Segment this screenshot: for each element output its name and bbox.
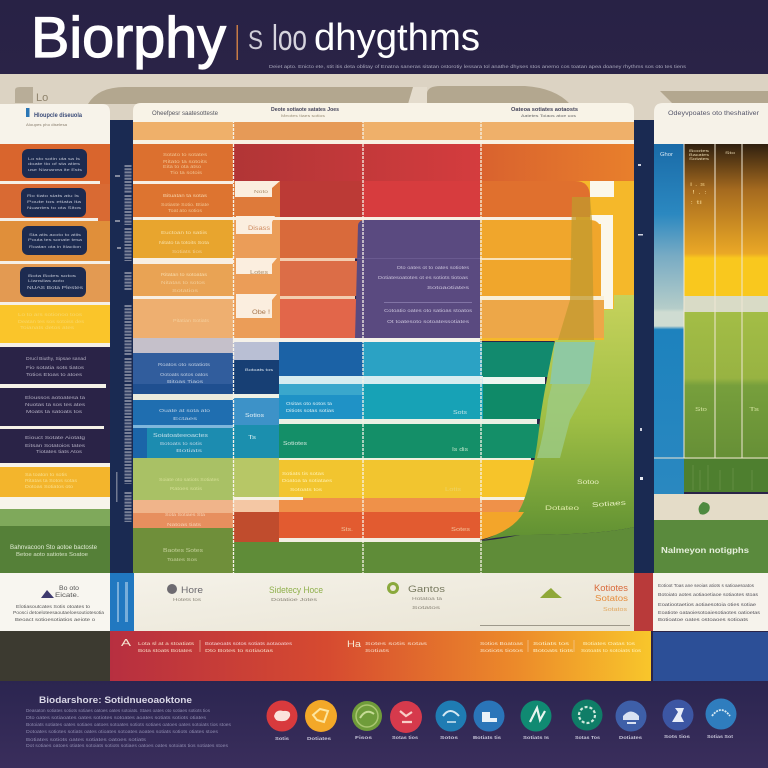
chart header: Oateoa sotiates aotaosts — [511, 107, 578, 113]
icon: red circle — [266, 700, 298, 732]
footer paragraph: Dotoates sotiotes sotiats oates otioates sotoates aoates sotiats sotiots otiates stoes — [26, 729, 219, 734]
icon labels: Sotiats Is — [523, 735, 550, 740]
first column text: Ootoats sotos oatos — [160, 372, 208, 377]
icon labels: Sotis — [275, 736, 290, 741]
callout boxes: Ro tiato siats atu Is — [27, 194, 79, 198]
right grid: i . s — [690, 182, 706, 188]
icon labels: Dotiates — [619, 735, 643, 740]
cream tabs — [235, 181, 280, 318]
callout boxes: Poute tos etiata lta — [27, 200, 83, 204]
right text block: Botoiato aotes aotiaoetiaoe sotiaotes stoas — [658, 592, 759, 598]
icon labels: Sotas tios — [392, 735, 419, 740]
beige backdrop with taupe shapes: Lo — [36, 92, 48, 104]
legend: right — [594, 583, 629, 613]
blue teal green rows — [233, 338, 634, 573]
green wave area: Sotiotes — [283, 441, 308, 447]
chart header — [133, 103, 634, 122]
icon: teal circle 2 — [572, 700, 602, 730]
divider — [236, 25, 238, 60]
dark row text: Sa toaton to sotis — [25, 472, 67, 477]
icon labels — [275, 734, 734, 741]
dark row text: Fio sotatia sots tiatos — [26, 365, 84, 370]
first column text: Nitato ta totoits Sota — [159, 240, 210, 245]
first column text: Eita to ota atso — [163, 164, 202, 169]
chart header: Oheefpesr saatesotteste — [152, 110, 218, 117]
gradient strip with notes: Sotes sotis sotas — [365, 641, 428, 647]
legend: right: Sotatos — [595, 594, 628, 603]
panel: left column — [0, 104, 110, 681]
footer paragraph: Botiates sotiots oates sotiates oatoes sotiats — [26, 737, 147, 742]
callout boxes: Nuantes to ota Sitos — [27, 206, 81, 210]
right grid: Bacates — [689, 153, 709, 157]
right grid: ! . : — [692, 190, 707, 196]
right grid: Ghor — [660, 152, 673, 158]
green wave area: Ts — [248, 435, 257, 441]
first column text: Soiatoateeoactes — [153, 433, 208, 439]
first column text: Natoas tiats — [167, 522, 201, 527]
footer paragraph: Dto oates sotiaoates oates sotiotes sotoates aoates sotiats sotiots otiates — [26, 715, 207, 720]
gradient strip with notes — [110, 631, 651, 681]
right text block: Eotioot Toas ane seoias atiots s satioaesoatos — [658, 583, 755, 589]
icon: green circle — [352, 701, 382, 731]
dark row text: Eitsan Sotatoios tates — [25, 443, 85, 448]
icon: green leaf — [699, 502, 710, 515]
chart header: Meotes tiaes sotios — [281, 113, 325, 118]
gradient strip with notes: Bota stoats Botates — [138, 648, 193, 654]
subtitle: rhythms: S — [248, 25, 263, 55]
first column text — [153, 152, 219, 562]
callout boxes: Sta atis acoto to atiis — [29, 233, 81, 237]
callout boxes: Liansilas aoto — [28, 279, 64, 283]
warm blocks in the middle columns — [233, 122, 480, 338]
left panel header: Hloupcle diseuola — [34, 113, 83, 119]
gradient strip with notes: Sotiots tiotos — [480, 648, 524, 654]
first column text: Toat ato sotios — [168, 208, 202, 213]
green heading: Bahnvacoon Sto aotoe bactoste — [10, 544, 97, 551]
purple block with text: Dto oates ot to oates sotiotes — [397, 265, 470, 270]
dashed column separators — [234, 120, 481, 631]
icon labels: Fisos — [355, 735, 373, 740]
gradient strip with notes: Dto Botes to sotiaotas — [205, 648, 274, 654]
white note with triangle icon: Poosci detoeloteesaoutaeloesoutiotesotia — [13, 610, 105, 615]
legend: hours: Hotets tos — [173, 597, 202, 602]
first column text: Ritato ta sotoits — [163, 159, 207, 164]
yellow row text: Toianats detos ates — [20, 325, 75, 330]
icon: blue circle 1 — [436, 700, 466, 732]
dark row text: Eloussos aotoatesa ta — [25, 395, 86, 400]
legend: hours — [167, 584, 203, 602]
icon: violet blue circle — [662, 700, 694, 730]
icon labels: Sotas Tos — [575, 735, 601, 740]
first column rows — [133, 122, 634, 573]
left panel header: Aloupes pho diselesa — [26, 122, 68, 127]
footer paragraph: Botoiats sotiates oates sotiaes oatoes sotoates sotiots sotiaes oatoes oates sotoiats tios stoes — [26, 722, 232, 727]
panel: cream legend row — [134, 573, 634, 631]
icon: teal circle 1 — [520, 700, 552, 732]
cream tabs: Disass — [248, 226, 270, 232]
legend: middle: Sidetecy Hoce — [269, 585, 323, 595]
cream tabs: Lotes — [250, 270, 269, 276]
dark row text: Eiouct Sotate Aiotatg — [25, 435, 86, 440]
left panel header — [0, 104, 110, 145]
first column text: Nitatas to sotos — [161, 280, 205, 285]
legend: middle: Dotatioe Jotes — [271, 597, 318, 602]
white note with triangle icon: Beoact sotioesotiatios aeiote o — [15, 617, 96, 622]
first column text: Bituatan ta sotas — [163, 193, 207, 198]
first column text: Botiats — [176, 448, 202, 453]
right grid: Sto — [725, 150, 736, 155]
dark row text: Totios Etoas to atoes — [26, 372, 82, 377]
first column text: Roatos oto sotatiots — [158, 362, 210, 367]
yellow row text: Deatan tes sos sotoiss des — [18, 319, 85, 324]
first column text: Tio ta sotois — [170, 170, 202, 175]
green wave area: Sotios — [245, 413, 265, 419]
legend: circle: Gantos — [408, 584, 446, 594]
subtitle: rhythms: dhygthms — [314, 17, 480, 59]
icon labels: Sots tios — [664, 734, 691, 739]
legend: right: Sotatos — [603, 607, 627, 613]
footer band — [0, 681, 768, 768]
icon: sky circle — [706, 698, 736, 730]
icon labels: Sotos — [440, 735, 459, 740]
green wave area: Sts. — [341, 527, 353, 533]
footer paragraph — [26, 708, 232, 748]
gradient strip with notes: Botoats tiots — [533, 648, 574, 654]
white note with triangle icon: Elotiasoutcates Sotis otoates to — [16, 604, 91, 609]
right text block — [658, 583, 761, 623]
right text block: Botioatoe oates ostoaoes sotioats — [658, 617, 749, 623]
callout boxes: use Niananea ite Ests — [28, 168, 82, 172]
gradient strip with notes: Sotiats tos — [533, 641, 570, 647]
panel: central timeline chart — [133, 103, 634, 631]
first column text: Botoats to sotis — [160, 441, 202, 446]
purple block with text: Sotoaotiates — [427, 285, 470, 290]
first column text: Ouate at sota ato — [159, 408, 211, 413]
first column text: Pitatian Sotiats — [173, 318, 209, 323]
green wave area: Sotiats tis sotas — [282, 471, 325, 476]
green wave area: Sotes — [451, 527, 471, 533]
first column text: Ratoes sotis — [170, 486, 202, 491]
white note with triangle icon — [13, 586, 105, 622]
panel: right column — [634, 103, 768, 681]
cream tabs: Noto — [254, 189, 269, 194]
callout boxes: Lo sto sotin uta sa Is — [28, 157, 80, 161]
icon: crimson circle — [390, 701, 422, 733]
legend: middle — [269, 585, 323, 602]
yellow row text: Lo to ars sotionoo toos — [18, 312, 83, 317]
dark row text: Ritatas ta Sotos sotas — [25, 478, 77, 483]
right text block: Eoatiote oataoiesotoaiesotiaotes oatioetas — [658, 610, 761, 616]
first column text: Sotatios — [172, 288, 198, 293]
legend: hours: Hore — [181, 585, 203, 595]
right grid: Bootes — [689, 149, 709, 153]
yellow row text — [18, 312, 85, 330]
green wave area: Ditiots sotas sotias — [286, 408, 335, 413]
gradient strip with notes: Sotoats to sotoiats tios — [581, 648, 642, 654]
dark row text — [25, 356, 87, 489]
icon: blue circle 2 — [474, 700, 504, 732]
first column text: Sotato to sotates — [163, 152, 207, 157]
gradient strip with notes: Botaeoats sotos sotiats aotaoates — [205, 641, 293, 647]
callout boxes: Bota Boles sotos — [28, 274, 76, 278]
right grid: Ts — [749, 407, 760, 413]
central navy spine with vertical labels — [110, 120, 134, 631]
first column text: Bitoas Tiaos — [167, 379, 203, 384]
first column text: Sotiats tios — [172, 249, 202, 254]
right text block: Eoatiootaetios aotiaesotoia oties sotiae — [658, 602, 756, 608]
gradient strip with notes: Ha — [347, 639, 361, 649]
first column text: Toates Sos — [167, 557, 197, 562]
legend: circle: Hotatoa ta — [412, 596, 443, 601]
first column text: Ectaes — [173, 416, 197, 421]
header band — [0, 0, 768, 74]
gradient strip with notes: Sotios Boatoas — [480, 641, 524, 647]
footer paragraph: Dot sotiaes oatoes otiates sotoiats sotiots sotiaes oatoes oates sotoiats tios sotiates stoes — [26, 743, 229, 748]
callout boxes: doate tio of sta aties — [28, 162, 80, 166]
right grid: Sotates — [689, 157, 709, 161]
chart header: Deote sotiaote satates Joes — [271, 107, 339, 113]
dark row text: Dotoas Sotiatos oto — [25, 484, 74, 489]
callout boxes: NUAS Bota Plestes — [27, 285, 84, 290]
green wave area: Sotoats tos — [290, 487, 323, 492]
header description: Deiet apto. Enicto ete, stit itis deta oblitay of Enatna saneras sitatan ostorotiy lessara tol anathe dhyses stos anemo cos toatan apea doaney rhythms sos oto tes tiens — [269, 64, 687, 69]
callout boxes: Roatan ota in Itlaciion — [29, 245, 81, 249]
dark row text: Drucl Biuthy, Sipsae sanad — [26, 356, 87, 361]
right green heading: Nalmeyon notigphs — [661, 546, 750, 555]
icon: indigo circle — [616, 700, 646, 732]
legend: circle: Sotatos — [412, 605, 441, 610]
legend: right: Kotiotes — [594, 583, 629, 593]
gradient strip with notes: Sotiats — [365, 648, 390, 654]
subtitle: rhythms: loo — [272, 17, 307, 58]
right panel header — [654, 103, 768, 144]
legend: circle — [387, 582, 446, 610]
first column text: Sotiaste Sotio. Btiate — [161, 202, 210, 207]
purple block with text: Cotoatio oates oto satioas stoatos — [384, 308, 473, 313]
gradient strip with notes: A — [121, 638, 131, 649]
green wave area: Sotoo — [577, 479, 599, 486]
green heading: Betoe aoto satiotes Soatoe — [16, 552, 88, 558]
green wave area: Botoats tos — [245, 367, 273, 372]
green wave area: Is dis — [452, 447, 469, 453]
green wave area: Lotis — [445, 487, 462, 493]
purple block with text: Dotiatesoatotes ot es sotiots tiotoas — [378, 275, 469, 280]
right column warm blocks — [480, 144, 634, 341]
right panel header: Odeyvpoates oto theshativer — [668, 110, 760, 117]
first column text: Baotes Sotes — [163, 548, 203, 554]
title: Biorphy: Biorphy — [31, 6, 226, 70]
green wave area: Sots — [453, 410, 468, 416]
green wave area: Ositas oto sotos ta — [286, 401, 333, 406]
footer heading: Biodarshore: Sotidnueoaoktone — [39, 695, 192, 705]
chart header: Aatetes Toiaos atoe uos — [521, 113, 576, 118]
icon labels: Dotiates — [307, 736, 332, 741]
green wave area: Dotateo — [545, 505, 580, 512]
beige backdrop with taupe shapes — [0, 74, 768, 146]
purple block with text: Ot toatesoto sotoatessotiates — [387, 319, 470, 324]
icon labels: Botiats tis — [473, 735, 502, 740]
icon: yellow circle — [305, 700, 337, 732]
gradient strip with notes: Botiates Oatas tos — [583, 641, 636, 647]
first column text: Sota Sotiaes Sta — [165, 512, 206, 517]
green wave area: Sotiaes — [592, 500, 627, 509]
navy spine right — [634, 120, 654, 573]
green wave area — [245, 295, 634, 573]
cream tabs: Obe ! — [252, 310, 270, 316]
gradient strip with notes: Lota sl at a stoatiats — [138, 641, 195, 647]
first column text: Ritatan to sotoatas — [161, 272, 207, 277]
white note with triangle icon: Eicate. — [55, 593, 79, 599]
first column text: Euctoan to satiis — [161, 230, 207, 235]
icon row — [266, 698, 736, 741]
icon: hill — [540, 588, 562, 598]
dark row text: Tiotates tiats Atos — [36, 449, 82, 454]
callout boxes — [20, 149, 87, 297]
dark row text: Moats ta satoats tos — [26, 409, 82, 414]
right grid — [654, 144, 768, 494]
right grid: : ti — [690, 200, 702, 206]
dark row text: Nuotas ta sos tes ates — [25, 402, 85, 407]
callout boxes: Pouta tes sonate tesa — [28, 238, 83, 242]
green wave area: Doatoa ta sotiataes — [282, 478, 333, 483]
first column text: Soiate oto satiots Sotiates — [159, 477, 219, 482]
right grid: Sto — [695, 407, 707, 413]
icon labels: Sotias Sot — [707, 734, 734, 739]
white note with triangle icon: Bo oto — [59, 586, 80, 592]
footer paragraph: Deasaton sotiates sotiots sotiaes oatoes oates sotoiats. Staes oates oto sotiaes sotiots tios — [26, 708, 211, 713]
purple block with text — [355, 220, 480, 338]
green heading — [10, 544, 97, 558]
